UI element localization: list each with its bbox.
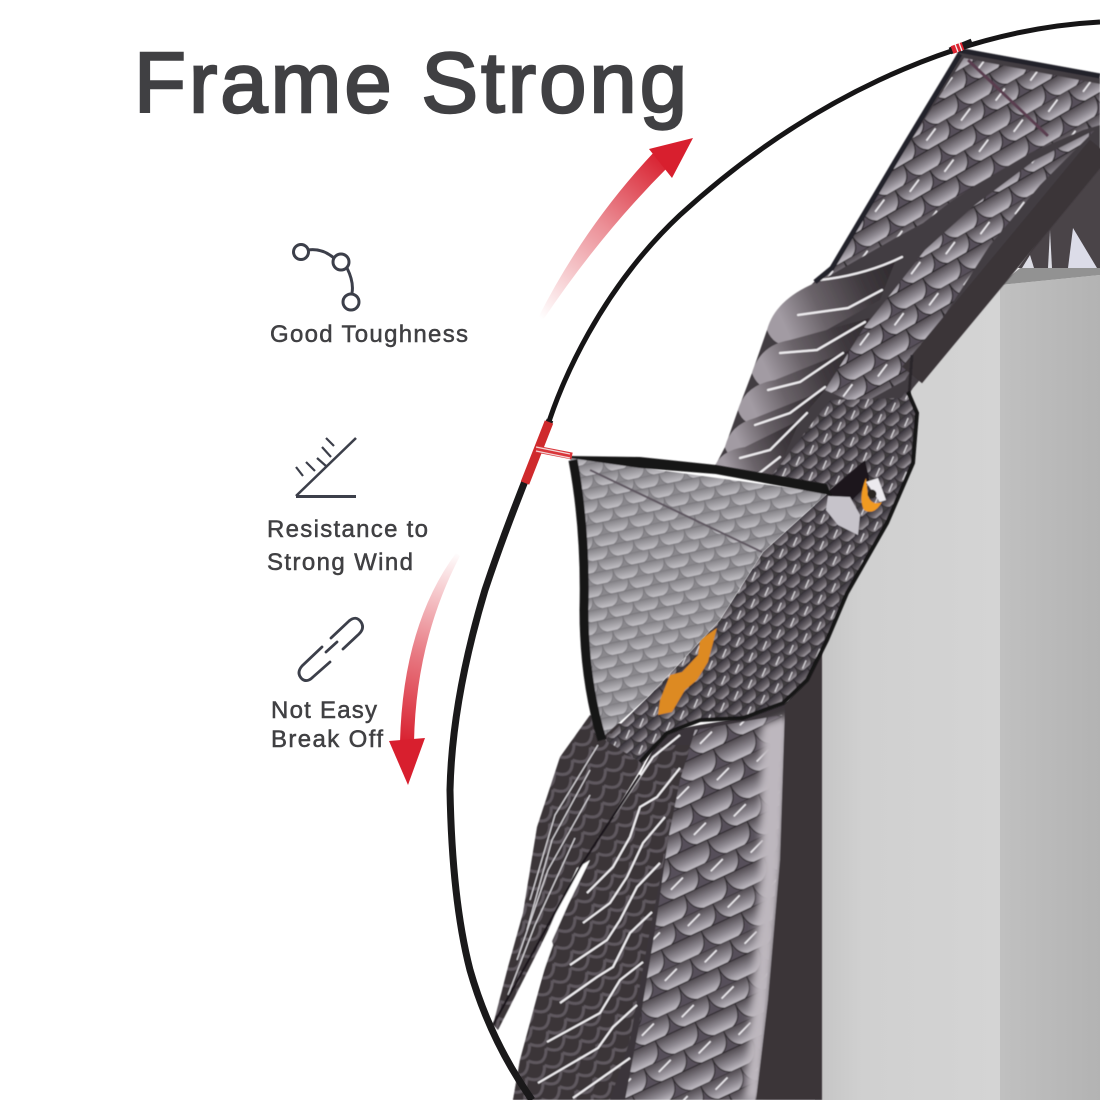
body outline xyxy=(640,392,917,762)
eye xyxy=(861,478,886,512)
icon: ruler angle xyxy=(296,438,356,496)
label: not easy break off xyxy=(271,697,383,753)
arrow: downward red curved xyxy=(389,553,460,785)
feather patch near head xyxy=(770,398,912,490)
round hoop frame xyxy=(450,22,1100,1100)
black top border xyxy=(815,50,1100,282)
white gap between strip and wing xyxy=(542,860,590,950)
strip streaks xyxy=(508,745,598,995)
kite body and head xyxy=(605,392,917,762)
label: resistance to strong wind xyxy=(267,516,428,576)
label: not easy break off: Break Off xyxy=(271,726,383,753)
dark feather rows xyxy=(513,745,690,1100)
pale vertical band xyxy=(745,715,790,1100)
scale area middle xyxy=(825,130,1095,405)
white beak patch xyxy=(826,496,860,535)
white quill streaks xyxy=(538,735,680,1098)
upper wing base xyxy=(713,52,1100,490)
top red band xyxy=(950,42,972,51)
icon: broken chain link xyxy=(299,618,363,681)
panel left border xyxy=(573,460,602,740)
kite pale panel xyxy=(570,457,830,740)
arrow: upward red curved xyxy=(538,138,693,320)
wing edge spike xyxy=(909,355,912,395)
large pale scales xyxy=(625,715,782,1100)
panel fabric xyxy=(570,458,828,738)
icon: curve with three nodes xyxy=(294,244,359,310)
body shape xyxy=(605,392,917,762)
primary feathers xyxy=(713,262,895,478)
kite lower wing xyxy=(493,650,822,1100)
main dark wing xyxy=(513,650,822,1100)
label: resistance to strong wind: Resistance to xyxy=(267,516,428,543)
kite spar xyxy=(493,775,640,1025)
outer feather strip xyxy=(493,715,660,1030)
background wall and grey box xyxy=(815,160,1100,1100)
title: Frame Strong xyxy=(134,36,687,131)
label: not easy break off: Not Easy xyxy=(271,697,377,724)
dark trailing edge xyxy=(912,148,1100,375)
panel seam xyxy=(590,470,762,552)
wing edge xyxy=(756,655,822,1100)
top wing streaks xyxy=(740,257,902,475)
label: good toughness: Good Toughness xyxy=(270,321,468,348)
head dark cap xyxy=(826,460,870,500)
purple seam xyxy=(968,60,1048,136)
scale area top xyxy=(822,58,1100,280)
kite upper wing xyxy=(713,50,1100,490)
panel top border xyxy=(570,457,830,494)
red and white tie xyxy=(536,449,572,456)
red sleeve on hoop xyxy=(525,422,549,483)
label: resistance to strong wind: Strong Wind xyxy=(267,549,413,576)
orange feet xyxy=(658,628,717,715)
